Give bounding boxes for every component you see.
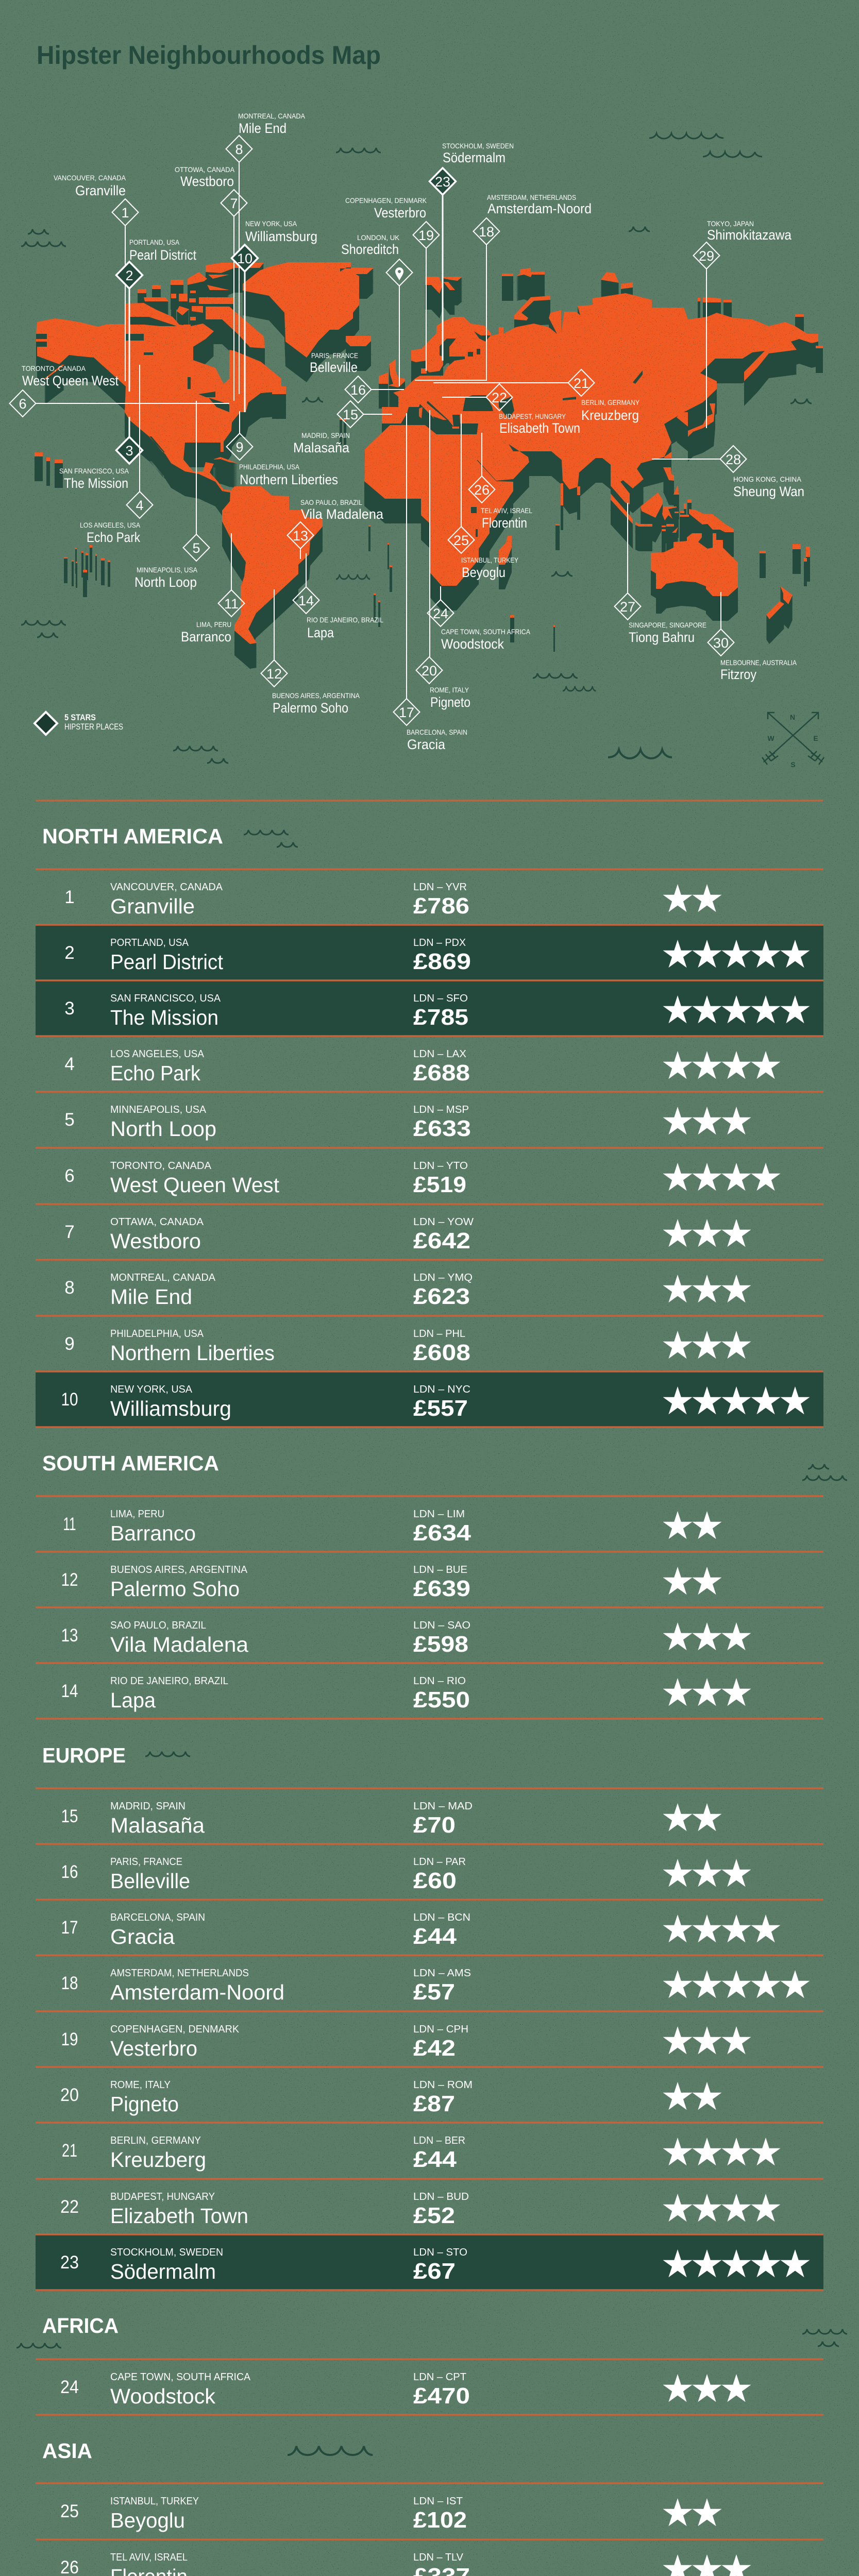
marker 1: Granville: VANCOUVER, CANADA — [54, 174, 126, 182]
marker 26: Florentin: TEL AVIV, ISRAEL — [481, 506, 532, 515]
marker 24: Woodstock — [428, 586, 531, 652]
row 5: MINNEAPOLIS, USA — [110, 1104, 207, 1115]
row 19: 19 — [61, 2029, 78, 2049]
marker 23: Södermalm: STOCKHOLM, SWEDEN — [442, 142, 514, 150]
row 13 — [61, 1620, 751, 1657]
marker 2: Pearl District: Pearl District — [129, 247, 196, 263]
marker pin: Shoreditch — [341, 233, 412, 386]
world map — [35, 262, 823, 669]
marker 16: Belleville: PARIS, FRANCE — [311, 351, 358, 360]
compass — [762, 713, 824, 769]
row 17: 17 — [61, 1918, 78, 1938]
row 6: West Queen West — [110, 1173, 280, 1197]
marker 12: Palermo Soho: 12 — [266, 666, 282, 682]
marker 15: Malasaña: 15 — [343, 407, 358, 422]
row 19: £42 — [413, 2036, 456, 2061]
row 7: LDN – YOW — [413, 1216, 474, 1228]
marker 8: Mile End: 8 — [235, 142, 243, 157]
marker 8: Mile End: Mile End — [239, 121, 287, 136]
marker 4: Echo Park: 4 — [136, 498, 144, 513]
marker 29: Shimokitazawa — [694, 219, 792, 428]
marker 5: North Loop: MINNEAPOLIS, USA — [137, 566, 198, 574]
marker 23: Södermalm — [430, 142, 514, 361]
marker 13: Vila Madalena — [288, 498, 384, 559]
title: Hipster Neighbourhoods Map — [37, 41, 381, 70]
row 19 — [61, 2024, 751, 2061]
marker pin: Shoreditch: Shoreditch — [341, 242, 399, 257]
row 26: TEL AVIV, ISRAEL — [110, 2552, 188, 2563]
row 4: £688 — [413, 1060, 470, 1086]
row 13: Vila Madalena — [110, 1633, 248, 1656]
row 17: BARCELONA, SPAIN — [110, 1912, 205, 1923]
marker 14: Lapa — [293, 553, 383, 640]
marker 26: Florentin: Florentin — [482, 515, 527, 531]
row 12: BUENOS AIRES, ARGENTINA — [110, 1564, 248, 1575]
legend: 5 stars hipster places: HIPSTER PLACES — [64, 722, 123, 732]
marker 11: Barranco: 11 — [224, 596, 239, 612]
marker 26: Florentin: 26 — [474, 482, 490, 498]
marker 18: Amsterdam-Noord — [415, 193, 592, 380]
marker 22: Elisabeth Town: Elisabeth Town — [499, 420, 580, 436]
row 16: £60 — [413, 1868, 457, 1893]
row 23: Södermalm — [110, 2260, 216, 2283]
marker 9: Northern Liberties: PHILADELPHIA, USA — [239, 463, 300, 471]
row 18: AMSTERDAM, NETHERLANDS — [110, 1968, 249, 1979]
marker 30: Fitzroy — [708, 592, 797, 682]
row 22 — [60, 2191, 781, 2228]
row 6: LDN – YTO — [413, 1160, 468, 1172]
row 2: PORTLAND, USA — [110, 937, 189, 948]
heading: Europe: EUROPE — [42, 1743, 126, 1767]
row 6: £519 — [413, 1172, 466, 1197]
row 7: OTTAWA, CANADA — [110, 1216, 204, 1228]
row 14: 14 — [61, 1681, 78, 1701]
row 4: LDN – LAX — [413, 1048, 466, 1060]
row 8: Mile End — [110, 1285, 192, 1309]
marker 20: Pigneto — [416, 410, 470, 710]
row 17: Gracia — [110, 1925, 175, 1948]
marker 21: Kreuzberg: 21 — [574, 376, 589, 391]
row 9: 9 — [64, 1334, 75, 1354]
row 3: The Mission — [110, 1006, 218, 1029]
row 12: LDN – BUE — [413, 1564, 467, 1575]
marker 24: Woodstock: 24 — [433, 606, 448, 621]
marker 18: Amsterdam-Noord: AMSTERDAM, NETHERLANDS — [487, 193, 576, 201]
row 9: PHILADELPHIA, USA — [110, 1328, 204, 1340]
row 6: TORONTO, CANADA — [110, 1160, 212, 1172]
row 23: £67 — [413, 2259, 456, 2284]
marker 8: Mile End: MONTREAL, CANADA — [238, 112, 306, 120]
marker 4: Echo Park — [80, 365, 153, 545]
row 25: 25 — [60, 2501, 79, 2521]
row 8: LDN – YMQ — [413, 1272, 473, 1283]
marker 13: Vila Madalena: 13 — [293, 528, 308, 544]
row 24 — [60, 2371, 751, 2409]
marker 14: Lapa: 14 — [298, 593, 314, 608]
row 7: 7 — [64, 1222, 75, 1242]
row 23 — [36, 2234, 823, 2290]
row 1 — [64, 882, 722, 919]
row 25: Beyoglu — [110, 2509, 185, 2532]
row 24: £470 — [413, 2383, 470, 2409]
table waves — [16, 830, 847, 2576]
heading: South America: SOUTH AMERICA — [42, 1451, 219, 1475]
row 24: 24 — [60, 2377, 79, 2397]
row 16 — [61, 1856, 751, 1893]
marker 1: Granville — [54, 174, 138, 381]
marker 29: Shimokitazawa: TOKYO, JAPAN — [707, 219, 754, 228]
row 20: ROME, ITALY — [110, 2079, 171, 2091]
row 9 — [64, 1328, 751, 1365]
row 4 — [64, 1048, 781, 1086]
row 24: CAPE TOWN, SOUTH AFRICA — [110, 2371, 251, 2383]
row 21: 21 — [62, 2141, 77, 2161]
row 20 — [60, 2079, 722, 2116]
row 13: £598 — [413, 1632, 468, 1657]
marker 10: Williamsburg: NEW YORK, USA — [245, 219, 297, 228]
row 16: 16 — [61, 1862, 78, 1882]
row 8: MONTREAL, CANADA — [110, 1272, 216, 1283]
row 12: Palermo Soho — [110, 1577, 240, 1601]
row 16: LDN – PAR — [413, 1856, 466, 1868]
marker 19: Vesterbro: 19 — [418, 228, 434, 243]
marker 24: Woodstock: CAPE TOWN, SOUTH AFRICA — [441, 628, 531, 636]
compass: S — [790, 760, 796, 769]
row 15: Malasaña — [110, 1814, 205, 1837]
marker 30: Fitzroy: Fitzroy — [720, 667, 756, 682]
marker 17: Gracia: Gracia — [407, 737, 446, 752]
marker 6: West Queen West: West Queen West — [22, 373, 119, 388]
marker 22: Elisabeth Town: 22 — [492, 390, 507, 405]
marker 20: Pigneto: 20 — [422, 663, 437, 679]
row 11: LIMA, PERU — [110, 1509, 164, 1520]
row 22: £52 — [413, 2203, 455, 2228]
row 25: £102 — [413, 2507, 467, 2533]
row 19: Vesterbro — [110, 2037, 197, 2060]
marker 10: Williamsburg — [232, 219, 317, 412]
row 11: 11 — [63, 1514, 76, 1534]
row 22: LDN – BUD — [413, 2191, 469, 2202]
row 20: Pigneto — [110, 2092, 179, 2116]
row 10: NEW YORK, USA — [110, 1384, 193, 1395]
marker 11: Barranco — [181, 533, 244, 645]
row 13: LDN – SAO — [413, 1620, 470, 1631]
map extrusion shadow — [35, 263, 823, 669]
row 11: £634 — [413, 1520, 471, 1546]
row 3: £785 — [413, 1005, 468, 1030]
row 25 — [60, 2496, 722, 2533]
row 21 — [62, 2135, 781, 2172]
ocean waves on map — [21, 133, 812, 763]
table section rules — [36, 800, 823, 802]
marker 9: Northern Liberties: 9 — [235, 439, 244, 455]
marker 25: Beyoglu — [448, 414, 519, 580]
marker 13: Vila Madalena: Vila Madalena — [301, 506, 384, 522]
marker 19: Vesterbro: COPENHAGEN, DENMARK — [345, 196, 427, 205]
legend: 5 stars hipster places — [35, 712, 123, 735]
marker 27: Tiong Bahru: 27 — [620, 599, 635, 615]
marker 16: Belleville — [310, 351, 404, 403]
marker 6: West Queen West — [9, 364, 229, 417]
marker 12: Palermo Soho: Palermo Soho — [273, 700, 348, 716]
row 16: PARIS, FRANCE — [110, 1856, 182, 1868]
marker 1: Granville: Granville — [75, 183, 126, 198]
row 4: Echo Park — [110, 1061, 200, 1085]
row 14: RIO DE JANEIRO, BRAZIL — [110, 1675, 228, 1687]
row 17: £44 — [413, 1924, 457, 1949]
row 19: COPENHAGEN, DENMARK — [110, 2024, 240, 2035]
row 20: £87 — [413, 2091, 455, 2116]
marker 3: The Mission: The Mission — [64, 476, 128, 491]
row 9: £608 — [413, 1340, 470, 1365]
marker 21: Kreuzberg: Kreuzberg — [581, 408, 639, 423]
marker 21: Kreuzberg — [433, 369, 640, 423]
row 8: £623 — [413, 1284, 470, 1309]
marker 30: Fitzroy: 30 — [713, 635, 729, 651]
marker 3: The Mission: SAN FRANCISCO, USA — [59, 467, 129, 475]
row 16: Belleville — [110, 1869, 190, 1893]
marker 3: The Mission: 3 — [125, 443, 133, 459]
row 10: Williamsburg — [110, 1397, 231, 1420]
marker 15: Malasaña: MADRID, SPAIN — [301, 431, 350, 439]
row 12: 12 — [61, 1570, 78, 1590]
row 24: Woodstock — [110, 2384, 215, 2408]
marker 5: North Loop: 5 — [192, 540, 200, 556]
marker 19: Vesterbro — [345, 196, 439, 371]
marker 5: North Loop — [134, 401, 209, 590]
row 25: ISTANBUL, TURKEY — [110, 2496, 199, 2507]
row 19: LDN – CPH — [413, 2024, 468, 2035]
marker 29: Shimokitazawa: 29 — [699, 248, 714, 264]
row 5: LDN – MSP — [413, 1104, 469, 1115]
row 23: LDN – STO — [413, 2247, 467, 2258]
row 26 — [60, 2552, 751, 2576]
marker 9: Northern Liberties: Northern Liberties — [240, 472, 338, 487]
marker 2: Pearl District — [116, 238, 196, 392]
row 22: BUDAPEST, HUNGARY — [110, 2191, 215, 2202]
marker 30: Fitzroy: MELBOURNE, AUSTRALIA — [720, 658, 797, 667]
row 1: 1 — [64, 887, 75, 907]
row 17: LDN – BCN — [413, 1912, 470, 1923]
row 15 — [61, 1801, 722, 1838]
row 26: LDN – TLV — [413, 2552, 464, 2563]
marker 12: Palermo Soho — [261, 589, 360, 716]
row 4: 4 — [64, 1054, 75, 1074]
row 9: Northern Liberties — [110, 1341, 275, 1365]
row 10: LDN – NYC — [413, 1384, 470, 1395]
row 20: 20 — [60, 2085, 79, 2105]
row 5: North Loop — [110, 1117, 216, 1141]
row 3: 3 — [64, 998, 75, 1019]
row 10: £557 — [413, 1396, 468, 1421]
row 10: 10 — [61, 1389, 78, 1410]
row 24: LDN – CPT — [413, 2371, 466, 2383]
orange continents — [35, 262, 823, 644]
marker 10: Williamsburg: 10 — [237, 251, 252, 266]
marker 2: Pearl District: 2 — [125, 268, 133, 283]
marker 7: Westboro — [175, 165, 247, 401]
row 4: LOS ANGELES, USA — [110, 1048, 205, 1060]
row 1: LDN – YVR — [413, 882, 467, 893]
row 25: LDN – IST — [413, 2496, 463, 2507]
marker 24: Woodstock: Woodstock — [441, 636, 504, 652]
row 22: 22 — [60, 2197, 79, 2217]
legend: 5 stars hipster places: 5 STARS — [64, 713, 96, 722]
heading: North America: NORTH AMERICA — [42, 824, 223, 848]
row 18: Amsterdam-Noord — [110, 1980, 284, 2004]
compass: W — [767, 734, 774, 742]
row 21: £44 — [413, 2147, 457, 2172]
row 23: STOCKHOLM, SWEDEN — [110, 2247, 223, 2258]
row 8 — [64, 1272, 751, 1309]
row 3: SAN FRANCISCO, USA — [110, 993, 221, 1004]
heading: Africa: AFRICA — [42, 2314, 119, 2337]
row 11: Barranco — [110, 1521, 196, 1545]
marker 23: Södermalm: Södermalm — [443, 150, 506, 165]
row 15: LDN – MAD — [413, 1801, 473, 1812]
marker 9: Northern Liberties — [227, 411, 338, 487]
row 9: LDN – PHL — [413, 1328, 465, 1340]
row 11: LDN – LIM — [413, 1509, 465, 1520]
marker 11: Barranco: Barranco — [181, 629, 231, 645]
marker 15: Malasaña — [293, 401, 392, 455]
row divider rules — [36, 869, 823, 2576]
row 14: LDN – RIO — [413, 1675, 466, 1687]
marker 25: Beyoglu: 25 — [453, 533, 469, 548]
marker 17: Gracia: 17 — [399, 705, 414, 720]
marker 16: Belleville: Belleville — [310, 360, 358, 375]
row 3 — [36, 980, 823, 1036]
marker 7: Westboro: Westboro — [180, 174, 234, 189]
row 2: LDN – PDX — [413, 937, 466, 948]
marker 5: North Loop: North Loop — [134, 574, 197, 590]
marker 7: Westboro: OTTOWA, CANADA — [175, 165, 235, 174]
row 20: LDN – ROM — [413, 2079, 473, 2091]
marker 28: Sheung Wan: 28 — [726, 452, 741, 467]
marker 25: Beyoglu: Beyoglu — [462, 565, 506, 580]
marker 27: Tiong Bahru: SINGAPORE, SINGAPORE — [629, 621, 706, 629]
marker 20: Pigneto: ROME, ITALY — [430, 686, 469, 694]
marker 14: Lapa: RIO DE JANEIRO, BRAZIL — [307, 616, 383, 624]
row 14 — [61, 1675, 751, 1713]
row 5: £633 — [413, 1116, 471, 1141]
row 22: Elizabeth Town — [110, 2204, 248, 2228]
row 13: 13 — [61, 1625, 78, 1646]
row 17 — [61, 1912, 781, 1949]
row 10 — [36, 1371, 823, 1427]
row 6 — [64, 1160, 781, 1197]
marker 20: Pigneto: Pigneto — [430, 694, 470, 710]
marker 19: Vesterbro: Vesterbro — [374, 205, 426, 221]
marker 28: Sheung Wan: HONG KONG, CHINA — [733, 475, 802, 483]
row 3: LDN – SFO — [413, 993, 468, 1004]
marker 15: Malasaña: Malasaña — [293, 440, 350, 455]
marker 11: Barranco: LIMA, PERU — [196, 620, 231, 629]
row 14: Lapa — [110, 1688, 156, 1712]
row 13: SAO PAULO, BRAZIL — [110, 1620, 206, 1631]
row 5 — [64, 1104, 751, 1141]
row 18: £57 — [413, 1979, 455, 2005]
marker 2: Pearl District: PORTLAND, USA — [129, 238, 180, 246]
row 7 — [64, 1216, 751, 1253]
marker 18: Amsterdam-Noord: 18 — [479, 224, 494, 240]
marker 28: Sheung Wan — [652, 446, 804, 499]
row 5: 5 — [64, 1110, 75, 1130]
marker 22: Elisabeth Town: BUDAPEST, HUNGARY — [499, 412, 566, 420]
compass: E — [813, 734, 818, 742]
marker 27: Tiong Bahru: Tiong Bahru — [629, 630, 695, 645]
marker 4: Echo Park: Echo Park — [87, 530, 140, 545]
row 1: £786 — [413, 893, 469, 919]
marker 18: Amsterdam-Noord: Amsterdam-Noord — [487, 201, 592, 216]
row 14: £550 — [413, 1687, 470, 1713]
marker 6: West Queen West: TORONTO, CANADA — [22, 364, 86, 372]
marker 21: Kreuzberg: BERLIN, GERMANY — [581, 398, 640, 406]
marker 7: Westboro: 7 — [230, 196, 238, 211]
row 2: 2 — [64, 943, 75, 963]
marker 17: Gracia — [394, 413, 467, 752]
marker 6: West Queen West: 6 — [19, 396, 27, 412]
marker 23: Södermalm: 23 — [435, 174, 450, 190]
row 15: MADRID, SPAIN — [110, 1801, 186, 1812]
row 12: £639 — [413, 1576, 470, 1601]
row 15: 15 — [61, 1806, 78, 1826]
row 1: Granville — [110, 894, 195, 918]
marker 27: Tiong Bahru — [614, 503, 706, 645]
row 1: VANCOUVER, CANADA — [110, 882, 223, 893]
row 18: 18 — [61, 1973, 78, 1993]
row 6: 6 — [64, 1166, 75, 1186]
row 11 — [63, 1509, 722, 1546]
marker 29: Shimokitazawa: Shimokitazawa — [707, 227, 792, 243]
row 23: 23 — [60, 2252, 79, 2273]
compass: N — [790, 713, 795, 721]
marker 25: Beyoglu: ISTANBUL, TURKEY — [461, 556, 519, 564]
row 2 — [36, 925, 823, 980]
row 2: Pearl District — [110, 950, 224, 974]
row 15: £70 — [413, 1812, 456, 1838]
marker 13: Vila Madalena: SAO PAULO, BRAZIL — [300, 498, 362, 506]
marker 16: Belleville: 16 — [350, 382, 366, 398]
marker 10: Williamsburg: Williamsburg — [245, 229, 317, 244]
heading: Asia: ASIA — [42, 2439, 92, 2463]
row 7: Westboro — [110, 1229, 201, 1253]
marker 22: Elisabeth Town — [442, 384, 580, 436]
row 21: LDN – BER — [413, 2135, 465, 2146]
marker 12: Palermo Soho: BUENOS AIRES, ARGENTINA — [272, 691, 360, 700]
marker 17: Gracia: BARCELONA, SPAIN — [407, 728, 467, 736]
marker 28: Sheung Wan: Sheung Wan — [733, 484, 804, 499]
marker 3: The Mission — [59, 417, 142, 491]
marker 8: Mile End — [226, 112, 306, 394]
row 2: £869 — [413, 949, 471, 974]
row 12 — [61, 1564, 722, 1601]
row 7: £642 — [413, 1228, 470, 1253]
marker 1: Granville: 1 — [121, 205, 129, 221]
row 18: LDN – AMS — [413, 1968, 471, 1979]
row 18 — [61, 1968, 810, 2005]
marker pin: Shoreditch: LONDON, UK — [357, 233, 400, 242]
marker 14: Lapa: Lapa — [307, 625, 334, 640]
marker 4: Echo Park: LOS ANGELES, USA — [80, 521, 141, 529]
row 8: 8 — [64, 1278, 75, 1298]
row 21: BERLIN, GERMANY — [110, 2135, 201, 2146]
row 21: Kreuzberg — [110, 2148, 206, 2172]
marker 26: Florentin — [469, 433, 532, 531]
